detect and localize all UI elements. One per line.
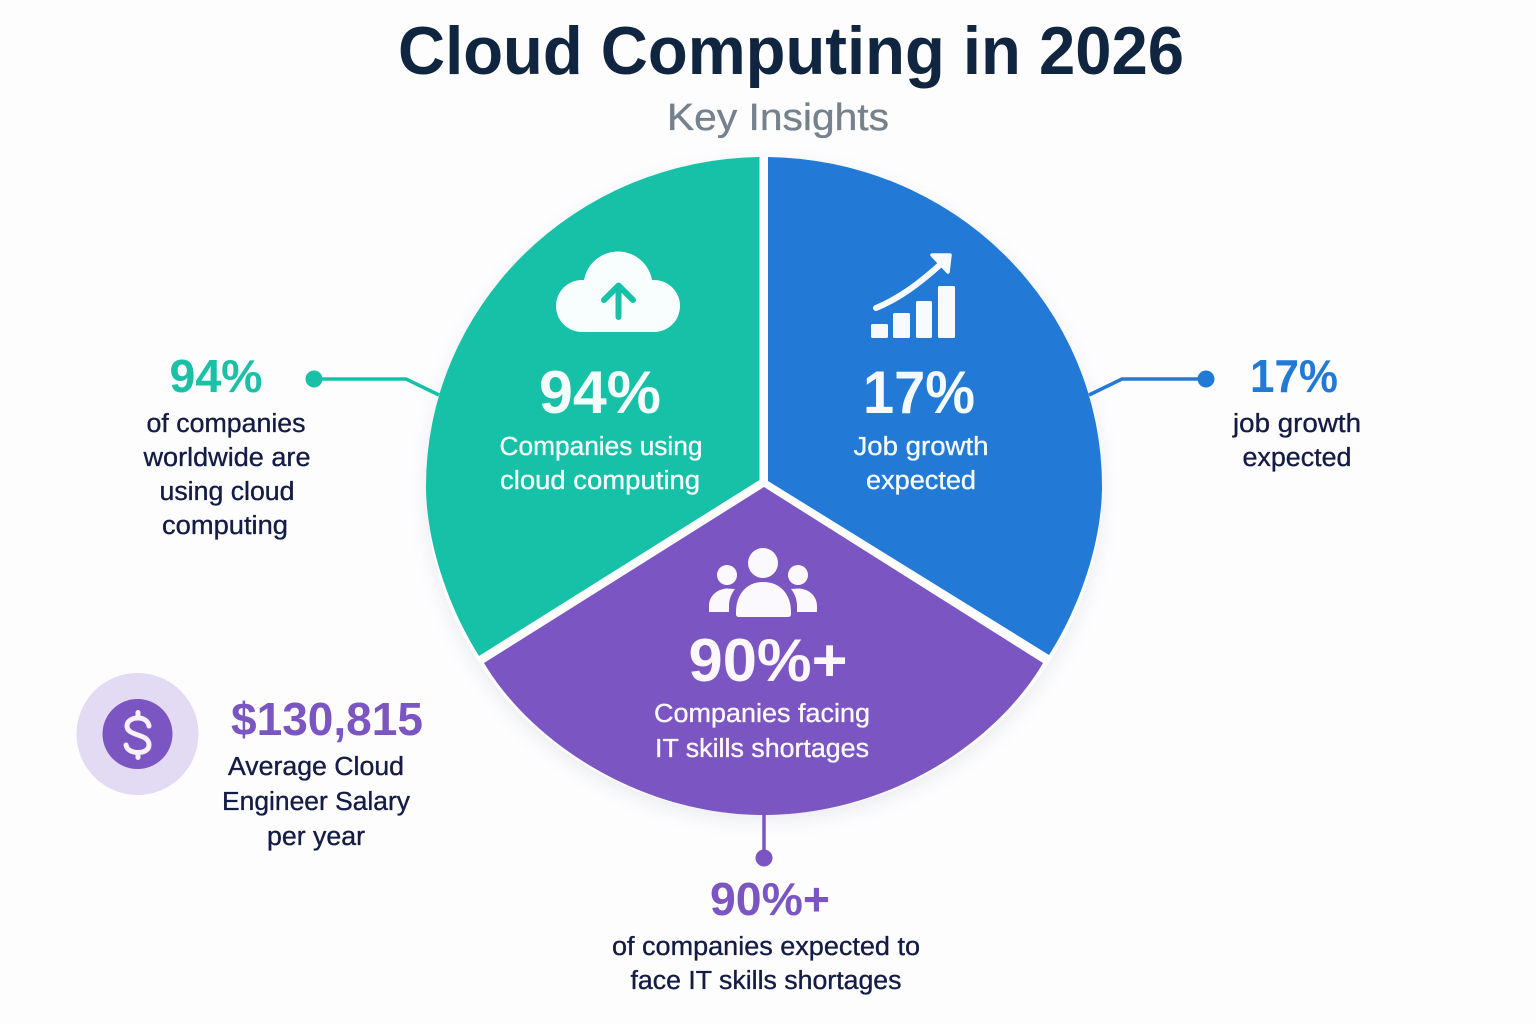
segment: job growth	[768, 157, 1102, 655]
callout: salary: $130,815	[231, 693, 423, 745]
callout: 94%: 94%	[170, 350, 262, 402]
label: 94% in pie: cloud computing	[500, 467, 700, 495]
callout: 90%+: of companies expected to	[612, 933, 920, 961]
connector: 90%+	[756, 812, 772, 866]
segment: companies using cloud	[426, 157, 760, 656]
callout: salary: Engineer Salary	[222, 788, 410, 816]
callout: 90%+: face IT skills shortages	[630, 967, 902, 995]
segment: skills shortages	[484, 487, 1043, 815]
title: Cloud Computing in 2026	[398, 13, 1184, 89]
callout: 90%+: 90%+	[710, 873, 830, 925]
callout: salary: Average Cloud	[228, 753, 404, 781]
subtitle: Key Insights	[667, 97, 889, 139]
label: 94% in pie	[500, 359, 702, 495]
icon: cloud upload	[556, 252, 680, 332]
callout: 94%: of companies	[146, 410, 306, 438]
callout: salary	[222, 693, 423, 851]
callout: 90%+	[612, 873, 920, 995]
callout: 17%: 17%	[1250, 350, 1338, 402]
callout: 17%	[1232, 350, 1361, 472]
label: 90%+ in pie: Companies facing	[654, 700, 870, 728]
label: 17% in pie: expected	[866, 467, 976, 495]
label: 17% in pie: Job growth	[854, 433, 988, 461]
callout: 94%: computing	[162, 512, 288, 540]
label: 90%+ in pie: 90%+	[688, 627, 848, 694]
label: 17% in pie	[854, 359, 988, 495]
label: 90%+ in pie	[654, 627, 870, 763]
icon: people	[709, 548, 817, 617]
label: 94% in pie: Companies using	[500, 433, 702, 461]
label: 94% in pie: 94%	[539, 359, 661, 426]
callout: salary: per year	[267, 823, 366, 851]
label: 17% in pie: 17%	[863, 359, 975, 426]
connector: 94%	[306, 370, 439, 395]
pie chart	[426, 157, 1102, 821]
icon: growth chart	[871, 255, 955, 338]
icon: dollar badge	[76, 673, 198, 795]
callout: 17%: job growth	[1232, 410, 1361, 438]
callout: 17%: expected	[1242, 444, 1352, 472]
callout: 94%: worldwide are	[142, 444, 310, 472]
callout: 94%	[142, 350, 310, 540]
label: 90%+ in pie: IT skills shortages	[655, 735, 869, 763]
connector: 17%	[1089, 370, 1214, 395]
callout: 94%: using cloud	[160, 478, 294, 506]
